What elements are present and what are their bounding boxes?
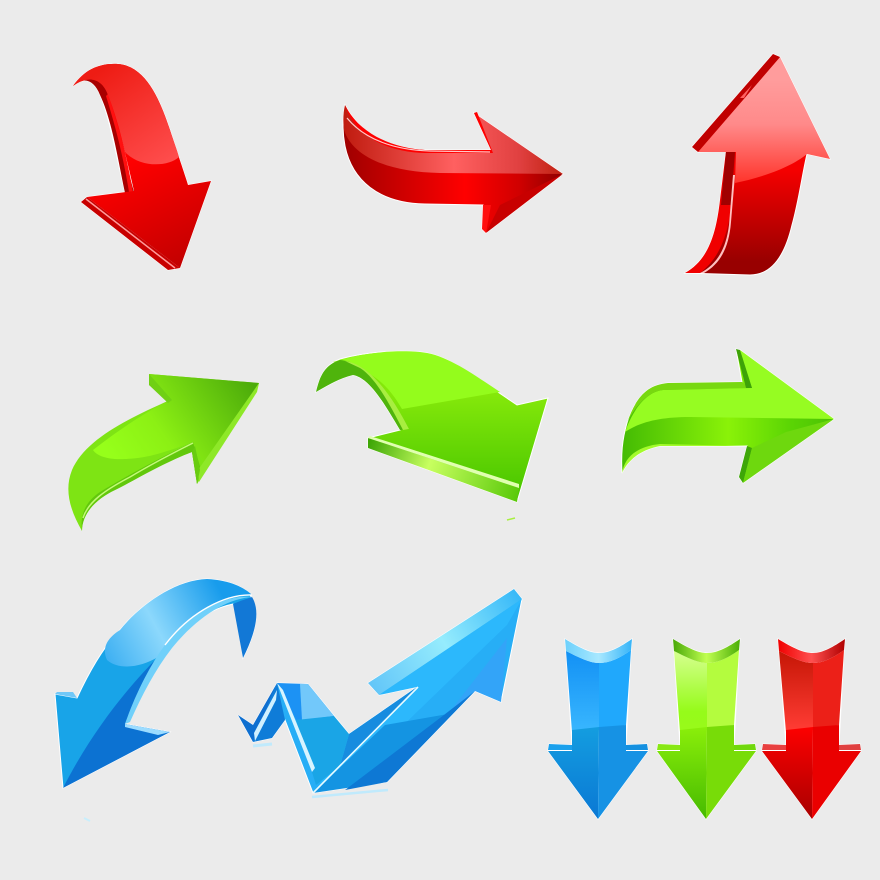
arrow: blue straight down: [548, 639, 648, 819]
arrow: blue zigzag up-right: [238, 589, 522, 797]
arrow: green curved up-right: [68, 374, 259, 531]
arrow: red curved up: [685, 54, 830, 275]
arrow: red curved down-right: [73, 64, 211, 270]
arrow: green straight down: [657, 639, 756, 819]
arrow: red straight down: [762, 639, 861, 819]
arrow: green swoosh right: [622, 349, 834, 483]
arrow: red swoosh right: [343, 105, 563, 233]
arrow: green curved down-right: [316, 351, 548, 520]
arrow: blue arc down-left: [55, 579, 256, 821]
